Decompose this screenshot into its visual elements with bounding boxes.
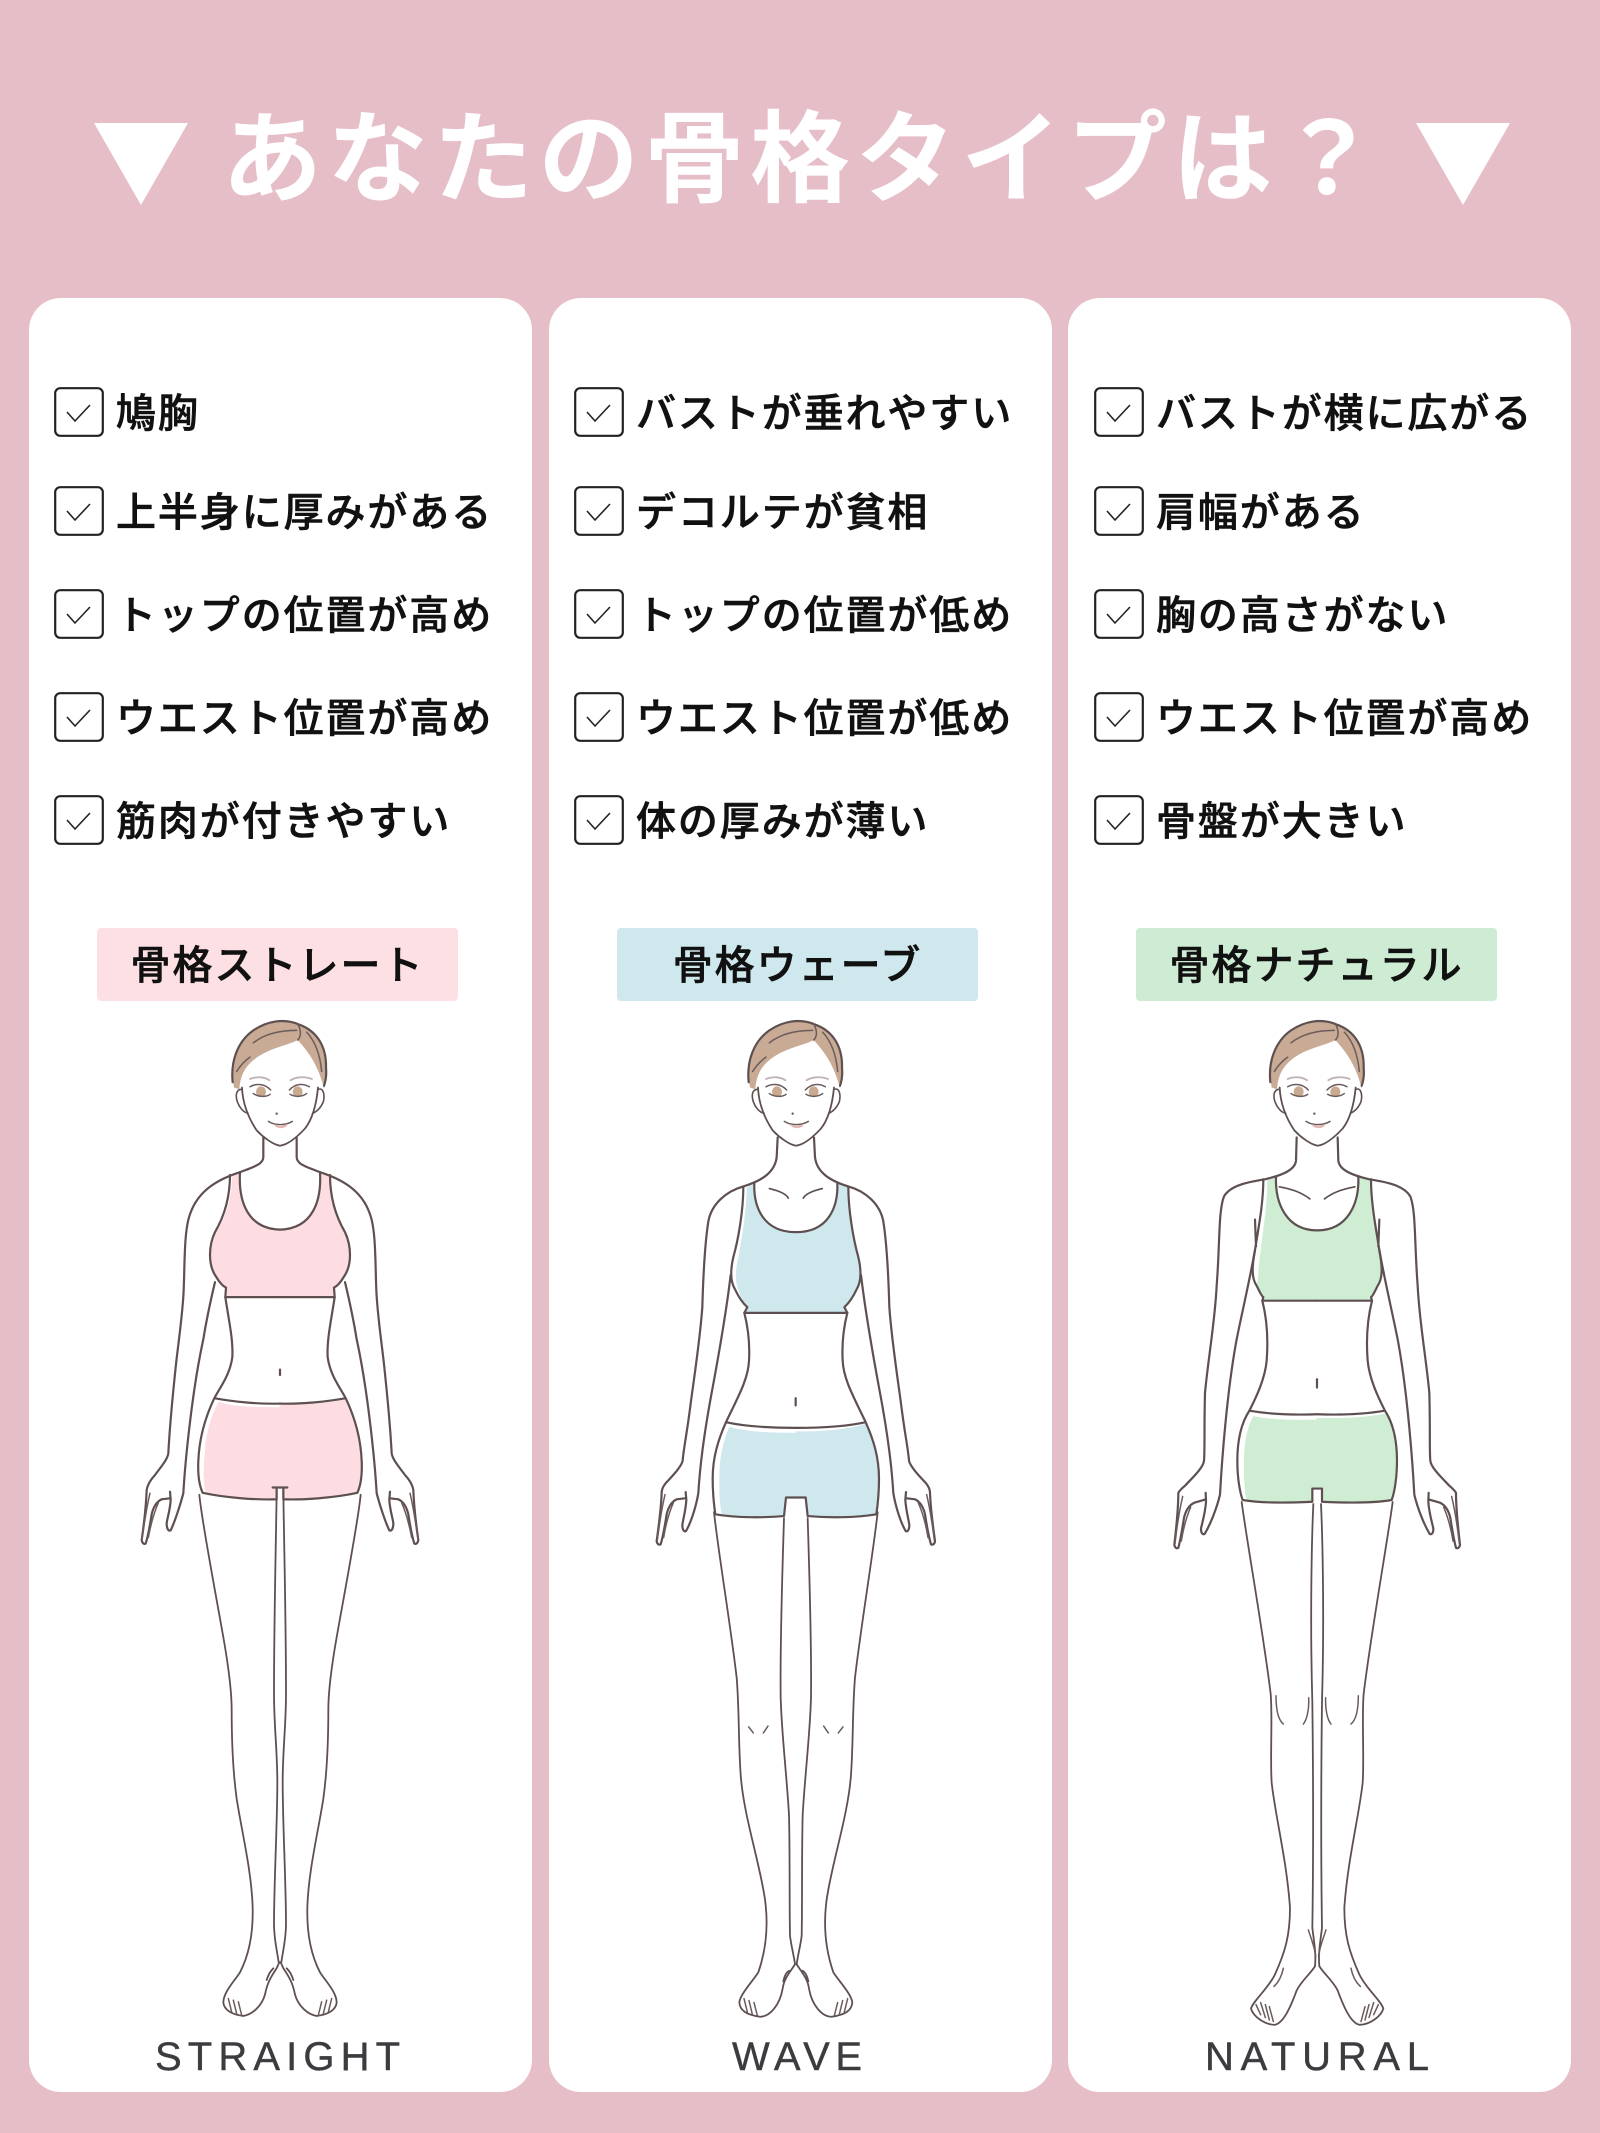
panel: wave	[549, 298, 1052, 2092]
label: STRAIGHT: STRAIGHT	[155, 2035, 400, 2079]
label: WAVE: WAVE	[732, 2035, 862, 2079]
figure: straight body illustration	[140, 1020, 420, 2079]
checklist item: 筋肉が付きやすい: 筋肉が付きやすい	[116, 800, 451, 844]
checklist item: 骨盤が大きい: 骨盤が大きい	[1156, 800, 1407, 844]
checklist item: ウエスト位置が低め: ウエスト位置が低め	[636, 697, 1013, 741]
checklist item: 鳩胸	[54, 387, 200, 437]
panel: natural	[1068, 298, 1571, 2092]
type label: 骨格ウェーブ	[617, 928, 978, 1001]
type label: 骨格ストレート: 骨格ストレート	[130, 944, 424, 988]
checklist item: 肩幅がある	[1094, 486, 1366, 536]
type label: 骨格ストレート	[97, 928, 458, 1001]
checklist item: ウエスト位置が高め: ウエスト位置が高め	[116, 697, 493, 741]
type label: 骨格ウェーブ: 骨格ウェーブ	[673, 944, 922, 988]
checklist item: 肩幅がある: 肩幅がある	[1156, 491, 1366, 535]
type label: 骨格ナチュラル	[1136, 928, 1497, 1001]
type label: 骨格ナチュラル: 骨格ナチュラル	[1170, 944, 1464, 988]
checklist item: トップの位置が低め: トップの位置が低め	[636, 594, 1013, 638]
checklist item: 胸の高さがない: 胸の高さがない	[1156, 594, 1449, 638]
bra and shorts fills	[1244, 1177, 1397, 1503]
checklist item: 上半身に厚みがある: 上半身に厚みがある	[116, 491, 493, 535]
checklist item: ウエスト位置が高め: ウエスト位置が高め	[1156, 697, 1533, 741]
icon: right triangle	[1416, 123, 1510, 205]
checklist item: 鳩胸: 鳩胸	[116, 392, 200, 436]
figure: natural body illustration	[1173, 1020, 1462, 2079]
checklist item: 体の厚みが薄い: 体の厚みが薄い	[636, 800, 929, 844]
checklist item: バストが垂れやすい: バストが垂れやすい	[636, 392, 1013, 436]
checklist item: トップの位置が高め: トップの位置が高め	[116, 594, 493, 638]
label: NATURAL: NATURAL	[1205, 2035, 1429, 2079]
title: あなたの骨格タイプは？	[222, 104, 1384, 216]
icon: left triangle	[94, 123, 188, 205]
bra and shorts fills	[719, 1183, 879, 1517]
checklist item: バストが横に広がる: バストが横に広がる	[1156, 392, 1533, 436]
figure: wave body illustration	[656, 1020, 936, 2079]
panel: straight	[29, 298, 532, 2092]
bra and shorts fills	[204, 1172, 362, 1499]
checklist item: デコルテが貧相: デコルテが貧相	[636, 491, 929, 535]
